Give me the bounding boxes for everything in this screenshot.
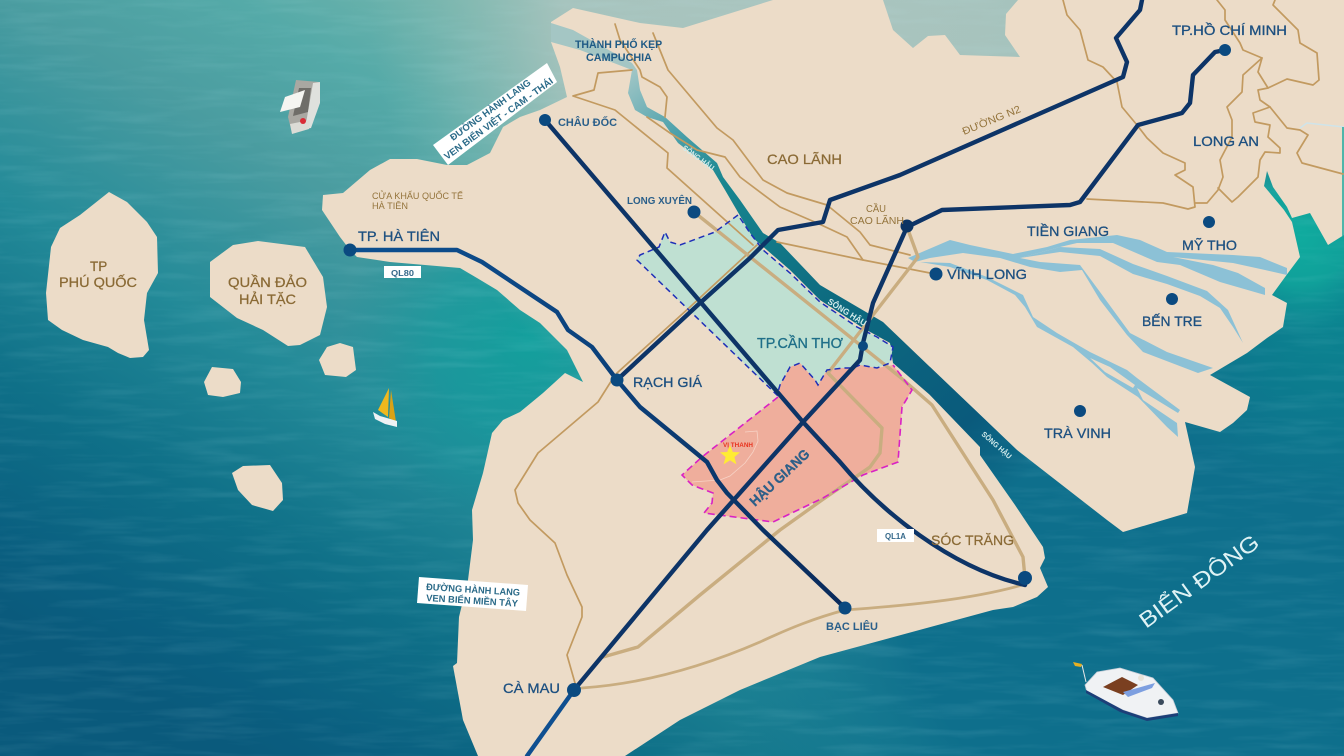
island: small middle bbox=[204, 367, 241, 397]
tag: QL1A: QL1A bbox=[885, 531, 906, 541]
area: Vị Thanh outline bbox=[692, 431, 758, 482]
zone: TP. Cần Thơ fill bbox=[637, 215, 893, 395]
label: Cửa khẩu quốc tế Hà Tiên: HÀ TIÊN bbox=[372, 201, 408, 211]
tag: QL80: QL80 bbox=[391, 268, 414, 278]
label: Bạc Liêu: BẠC LIÊU bbox=[826, 620, 878, 633]
river: Sông Hậu bbox=[628, 70, 1045, 490]
label: Trà Vinh: TRÀ VINH bbox=[1044, 425, 1111, 441]
zone outline: Cần Thơ bbox=[637, 215, 893, 395]
label: TP.Hồ Chí Minh: TP.HỒ CHÍ MINH bbox=[1172, 21, 1287, 38]
label: Vĩnh Long: VĨNH LONG bbox=[947, 266, 1027, 282]
label: TP Phú Quốc: PHÚ QUỐC bbox=[59, 273, 137, 290]
label: Mỹ Tho: MỸ THO bbox=[1182, 237, 1237, 253]
label: Thành phố kẹp Campuchia: CAMPUCHIA bbox=[586, 52, 652, 64]
label: Quần đảo Hải Tặc: QUẦN ĐẢO bbox=[228, 274, 307, 290]
label: Thành phố kẹp Campuchia: THÀNH PHỐ KẸP bbox=[575, 37, 662, 51]
highways: QL tan roads bbox=[582, 212, 1025, 688]
callout: Đường hành lang ven biển miền Tây: VEN BIỂN MIỀN TÂY bbox=[426, 592, 519, 610]
label: Sóc Trăng: SÓC TRĂNG bbox=[931, 532, 1014, 548]
island: Phú Quốc bbox=[46, 192, 158, 358]
label: Đường N2: ĐƯỜNG N2 bbox=[960, 102, 1023, 138]
label: Bến Tre: BẾN TRE bbox=[1142, 313, 1202, 329]
label: Cầu Cao Lãnh: CẦU bbox=[866, 202, 886, 215]
label: Châu Đốc: CHÂU ĐỐC bbox=[558, 115, 617, 129]
expressway: southern spur of Cà Mau bbox=[527, 690, 574, 756]
icon: speedboat bbox=[1073, 662, 1178, 721]
label: Cao Lãnh: CAO LÃNH bbox=[767, 151, 842, 167]
zone: Hậu Giang fill bbox=[682, 363, 912, 522]
tag: QL80 bbox=[384, 266, 421, 278]
city markers bbox=[344, 44, 1231, 697]
island: small south bbox=[232, 465, 283, 511]
label: Long An: LONG AN bbox=[1193, 133, 1259, 149]
label: Hậu Giang: HẬU GIANG bbox=[745, 445, 813, 509]
label: TP Phú Quốc: TP bbox=[90, 258, 107, 274]
island: Hải Tặc bbox=[210, 241, 327, 346]
icon: sailboat bbox=[373, 388, 397, 427]
expressway: Cà Mau to TP.HCM bbox=[574, 50, 1225, 690]
callout: Đường hành lang ven biển miền Tây bbox=[417, 577, 528, 611]
label: TP. Hà Tiên: TP. HÀ TIÊN bbox=[358, 228, 440, 244]
river: upper inlet bbox=[551, 23, 637, 70]
label: Biển Đông: BIỂN ĐÔNG bbox=[1134, 529, 1264, 633]
icon: star Vị Thanh bbox=[720, 445, 740, 464]
callout: Đường hành lang ven biển Việt Cam Thái: ĐƯỜNG HÀNH LANG bbox=[448, 77, 533, 143]
label: Quần đảo Hải Tặc: HẢI TẶC bbox=[239, 291, 296, 307]
icon: houseboat bbox=[280, 80, 320, 134]
label: TP.Cần Thơ: TP.CẦN THƠ bbox=[757, 335, 843, 352]
label: Tiền Giang: TIỀN GIANG bbox=[1027, 223, 1109, 239]
label: Sông Hậu south: SÔNG HẬU bbox=[980, 430, 1014, 461]
callout: Đường hành lang ven biển miền Tây: ĐƯỜNG HÀNH LANG bbox=[426, 581, 520, 599]
label: Sông Hậu north: SÔNG HẬU bbox=[681, 143, 716, 172]
rivers: Tiền Giang branches bbox=[908, 123, 1344, 437]
expressway: Châu Đốc to Sóc Trăng bbox=[545, 120, 1025, 585]
expressway: N2 from Rạch Giá bbox=[617, 0, 1142, 380]
label: Long Xuyên: LONG XUYÊN bbox=[627, 194, 692, 207]
provincial roads bbox=[515, 0, 1343, 683]
label: Cầu Cao Lãnh: CAO LÃNH bbox=[850, 214, 904, 227]
label: Cửa khẩu quốc tế Hà Tiên: CỬA KHẨU QUỐC TẾ bbox=[372, 190, 463, 201]
label: Rạch Giá: RẠCH GIÁ bbox=[633, 374, 703, 390]
label: Vị Thanh: VỊ THANH bbox=[723, 442, 753, 449]
expressway: Hà Tiên to Bạc Liêu bbox=[350, 250, 845, 608]
tag: QL1A bbox=[877, 529, 914, 542]
label: Cà Mau: CÀ MAU bbox=[503, 680, 560, 696]
callout: Đường hành lang ven biển Việt Cam Thái: VEN BIỂN VIỆT - CAM - THÁI bbox=[442, 75, 556, 162]
label: Sông Hậu middle: SÔNG HẬU bbox=[826, 295, 869, 328]
island: small east bbox=[319, 343, 356, 377]
zone outline: Hậu Giang bbox=[682, 365, 912, 522]
land: mekong delta mainland bbox=[322, 0, 1344, 756]
